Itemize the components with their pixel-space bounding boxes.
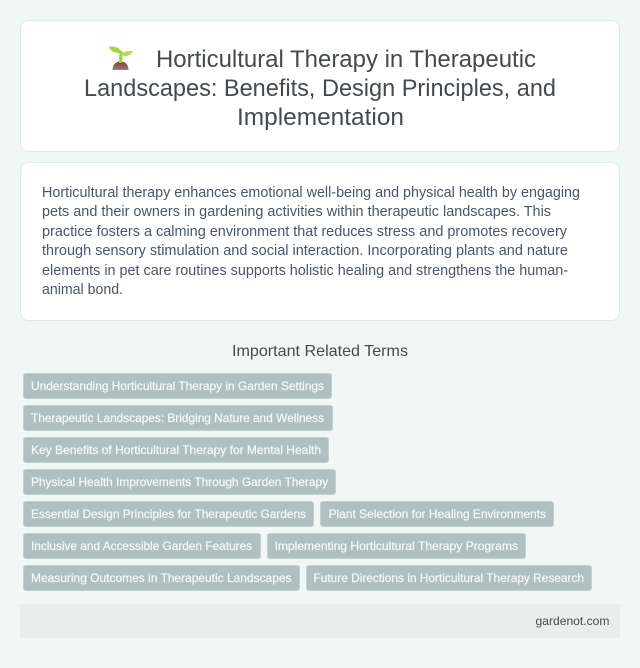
footer: [20, 604, 620, 638]
tag: key benefits: Key Benefits of Horticultural Therapy for Mental Health: [31, 443, 321, 457]
tag: design principles: [24, 502, 314, 526]
title: [84, 46, 556, 131]
description text: elements in pet care routines supports holistic healing and strengthens the human-: [42, 262, 568, 279]
panel: description: [20, 162, 620, 320]
tag: design principles: Essential Design Principles for Therapeutic Gardens: [31, 507, 306, 521]
tag: inclusive features: Inclusive and Accessible Garden Features: [31, 539, 252, 553]
tag: physical health: [24, 470, 336, 494]
icon: seedling: [109, 46, 133, 70]
tag: understanding: Understanding Horticultural Therapy in Garden Settings: [31, 379, 324, 393]
description text: through sensory stimulation and social interaction. Incorporating plants and nature: [42, 242, 568, 259]
title: Implementation: [237, 104, 404, 131]
description text: Horticultural therapy enhances emotional well-being and physical health by engaging: [42, 184, 580, 201]
tag: key benefits: [24, 438, 328, 462]
tag: physical health: Physical Health Improvements Through Garden Therapy: [31, 475, 328, 489]
tag: inclusive features: [24, 534, 260, 558]
tag: implementing programs: [268, 534, 526, 558]
title: Horticultural Therapy in Therapeutic: [156, 46, 536, 73]
tag: measuring outcomes: Measuring Outcomes in Therapeutic Landscapes: [31, 571, 292, 585]
tag: plant selection: [320, 502, 554, 526]
description text: animal bond.: [42, 281, 123, 298]
tag: future directions: Future Directions in Horticultural Therapy Research: [314, 571, 584, 585]
tag: therapeutic landscapes: Therapeutic Landscapes: Bridging Nature and Wellness: [31, 411, 324, 425]
tag: measuring outcomes: [24, 566, 300, 590]
tag: understanding: [24, 374, 332, 398]
title: Landscapes: Benefits, Design Principles, and: [84, 75, 556, 102]
footer: gardenot.com: [536, 614, 610, 628]
tag: future directions: [306, 566, 592, 590]
description text: pets and their owners in gardening activities within therapeutic landscapes. This: [42, 203, 551, 220]
tag: plant selection: Plant Selection for Healing Environments: [328, 507, 546, 521]
tag: implementing programs: Implementing Horticultural Therapy Programs: [274, 539, 518, 553]
heading: related terms: Important Related Terms: [232, 343, 408, 360]
tag: therapeutic landscapes: [24, 406, 332, 430]
description text: practice fosters a calming environment that reduces stress and promotes recovery: [42, 223, 567, 240]
description text: [42, 184, 580, 298]
panel: title card: [20, 20, 620, 152]
